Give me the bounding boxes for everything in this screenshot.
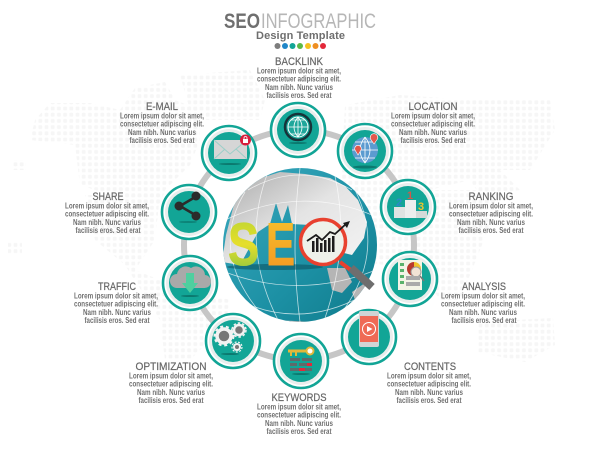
text: ranking: [449, 191, 533, 235]
node: keywords: [274, 334, 328, 388]
title: SEO: [224, 10, 260, 33]
icon: globe with map pins: [352, 134, 378, 168]
title: INFOGRAPHIC: [261, 10, 376, 33]
text: e-mail: Nam nibh. Nunc varius: [128, 128, 196, 137]
icon: share nodes: [175, 192, 200, 223]
icon: report with magnifier: [398, 260, 424, 290]
text: keywords: Nam nibh. Nunc varius: [265, 419, 333, 428]
text: keywords: KEYWORDS: [272, 392, 326, 404]
text: keywords: [257, 392, 341, 436]
text: optimization: Nam nibh. Nunc varius: [137, 388, 205, 397]
node: e-mail: [202, 126, 256, 180]
text: analysis: Nam nibh. Nunc varius: [449, 308, 517, 317]
text: location: Nam nibh. Nunc varius: [399, 128, 467, 137]
text: backlink: [257, 56, 341, 100]
text: e-mail: facilisis eros. Sed erat: [130, 136, 195, 145]
icon: gears: [214, 323, 246, 355]
text: keywords: facilisis eros. Sed erat: [266, 427, 332, 436]
text: share: SHARE: [92, 191, 124, 203]
node: traffic: [163, 256, 217, 310]
icon: cloud download: [170, 266, 211, 297]
text: e-mail: Lorem ipsum dolor sit amet,: [120, 112, 204, 120]
text: ranking: consectetuer adipiscing elit.: [449, 210, 533, 218]
text: traffic: TRAFFIC: [98, 281, 136, 293]
text: e-mail: consectetuer adipiscing elit.: [120, 120, 204, 128]
text: optimization: consectetuer adipiscing elit.: [129, 380, 213, 388]
icon: podium: 3: [418, 201, 424, 213]
text: ranking: facilisis eros. Sed erat: [458, 226, 524, 235]
node: location: [338, 124, 392, 178]
text: share: consectetuer adipiscing elit.: [65, 210, 149, 218]
icon: podium: 1: [407, 190, 413, 202]
SEO lettering on globe: [228, 211, 295, 278]
text: ranking: Nam nibh. Nunc varius: [457, 218, 525, 227]
text: traffic: facilisis eros. Sed erat: [84, 316, 150, 325]
node: ranking: [381, 180, 435, 234]
text: e-mail: E-MAIL: [146, 101, 178, 113]
node: contents: [342, 310, 396, 364]
text: traffic: [74, 281, 158, 325]
SEO lettering on globe: S: [228, 211, 259, 278]
node: analysis: [383, 252, 437, 306]
icon: globe with arrows: [285, 114, 311, 144]
text: contents: CONTENTS: [404, 361, 456, 373]
text: ranking: RANKING: [468, 191, 514, 203]
globe: [222, 168, 377, 330]
title: [224, 10, 376, 42]
text: analysis: consectetuer adipiscing elit.: [441, 300, 525, 308]
text: optimization: facilisis eros. Sed erat: [138, 396, 204, 405]
dotted world map background: [8, 70, 555, 362]
text: contents: facilisis eros. Sed erat: [396, 396, 462, 405]
icon: podium: 2: [396, 197, 402, 209]
text: share: Lorem ipsum dolor sit amet,: [65, 202, 149, 210]
text: traffic: Lorem ipsum dolor sit amet,: [74, 292, 158, 300]
icon: phone with play button: [359, 311, 379, 347]
colour dots: [274, 43, 326, 49]
node: optimization: [206, 314, 260, 368]
text: traffic: Nam nibh. Nunc varius: [83, 308, 151, 317]
icon: envelope with lock: [214, 134, 251, 165]
text: location: LOCATION: [408, 101, 458, 113]
text: keywords: Lorem ipsum dolor sit amet,: [257, 402, 341, 412]
icon: key over brick wall: [288, 348, 314, 375]
text: location: consectetuer adipiscing elit.: [391, 120, 475, 128]
magnifier with growth chart: [300, 220, 372, 287]
text: optimization: Lorem ipsum dolor sit amet,: [129, 372, 213, 380]
text: analysis: Lorem ipsum dolor sit amet,: [441, 292, 525, 300]
text: location: facilisis eros. Sed erat: [400, 136, 466, 145]
text: e-mail: [120, 101, 204, 145]
title: Design Template: [256, 30, 345, 42]
text: backlink: facilisis eros. Sed erat: [266, 91, 332, 100]
text: analysis: [441, 281, 525, 325]
icon: podium: [394, 190, 427, 218]
text: backlink: Lorem ipsum dolor sit amet,: [257, 66, 341, 76]
text: share: facilisis eros. Sed erat: [76, 226, 141, 235]
node: backlink: [271, 103, 325, 157]
text: traffic: consectetuer adipiscing elit.: [74, 300, 158, 308]
text: share: Nam nibh. Nunc varius: [73, 218, 141, 227]
text: contents: [387, 361, 471, 405]
text: keywords: consectetuer adipiscing elit.: [257, 410, 341, 420]
text: backlink: consectetuer adipiscing elit.: [257, 74, 341, 84]
text: optimization: [129, 361, 213, 405]
node: share: [162, 185, 216, 239]
text: location: Lorem ipsum dolor sit amet,: [391, 112, 475, 120]
text: backlink: Nam nibh. Nunc varius: [265, 83, 333, 92]
SEO lettering on globe: E: [266, 211, 295, 278]
text: contents: consectetuer adipiscing elit.: [387, 380, 471, 388]
text: share: [65, 191, 149, 235]
text: contents: Nam nibh. Nunc varius: [395, 388, 463, 397]
text: contents: Lorem ipsum dolor sit amet,: [387, 372, 471, 380]
text: optimization: OPTIMIZATION: [136, 361, 207, 373]
text: analysis: facilisis eros. Sed erat: [452, 316, 517, 325]
text: analysis: ANALYSIS: [462, 281, 506, 293]
connecting ring: [184, 130, 414, 360]
text: location: [391, 101, 475, 145]
text: ranking: Lorem ipsum dolor sit amet,: [449, 202, 533, 210]
text: backlink: BACKLINK: [275, 56, 324, 68]
